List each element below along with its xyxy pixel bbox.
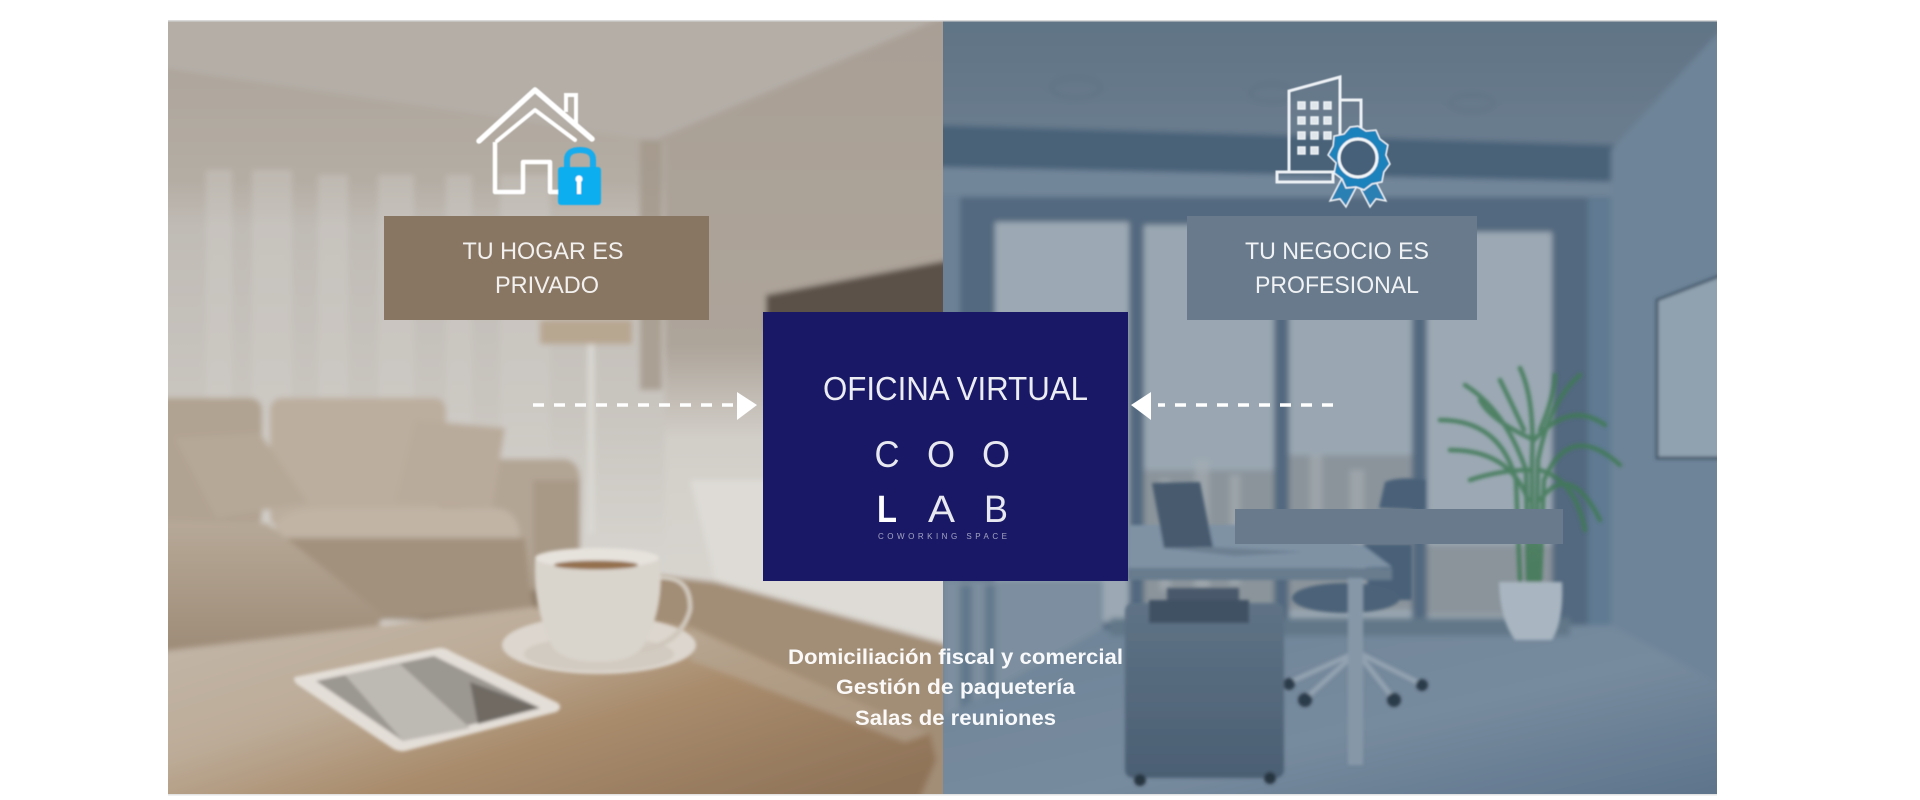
arrow: home to virtual office: [533, 392, 757, 420]
faint frame lines: [168, 20, 1717, 796]
logo: coolab: O: [927, 434, 955, 475]
sofa arm: [440, 459, 580, 590]
glass: [995, 222, 1129, 622]
chair seat: [1292, 583, 1400, 613]
logo: coolab: A: [928, 489, 956, 531]
beam: [930, 125, 1615, 182]
arrow: business to virtual office: [1131, 392, 1333, 420]
label: business: TU NEGOCIO ES: [1245, 238, 1429, 265]
reflection on table: [690, 628, 930, 742]
logo: coolab: B: [984, 489, 1008, 531]
padlock: [558, 150, 601, 205]
floor: [930, 625, 1730, 800]
plant: [1440, 368, 1620, 580]
icon: office building with award rosette: [1277, 77, 1390, 207]
infographic canvas: [168, 20, 1717, 796]
label: business: PROFESIONAL: [1255, 272, 1419, 299]
logo: coolab: [874, 434, 1010, 541]
text block: services list: Gestión de paquetería: [836, 676, 1075, 699]
pot: [1499, 582, 1562, 640]
cup handle: [659, 576, 694, 646]
lower left chrome area: [943, 581, 1105, 716]
logo: coolab: COWORKING SPACE: [878, 532, 1007, 541]
house roof: [479, 90, 592, 141]
house walls: [495, 142, 560, 192]
label: home: TU HOGAR ES: [462, 238, 624, 265]
lamp: [540, 320, 632, 344]
saucer: [502, 616, 696, 674]
sofa back: [168, 396, 264, 526]
tablet: [294, 648, 560, 751]
right wall: [1608, 146, 1618, 182]
heading: oficina virtual: OFICINA VIRTUAL: [823, 370, 1088, 407]
city skyline: [1144, 455, 1552, 615]
label: home: PRIVADO: [495, 272, 599, 299]
building windows: [1298, 102, 1331, 154]
grey band: [1235, 509, 1563, 544]
picture frame: [1654, 274, 1717, 461]
ribbons: [1330, 178, 1386, 207]
pillar: [1588, 198, 1612, 636]
curtains: [168, 196, 667, 628]
text block: services list: [788, 646, 1123, 730]
white cabinet: [694, 482, 763, 552]
sofa shadow base: [394, 591, 538, 624]
desk top: [1128, 525, 1392, 572]
chair base: [1290, 652, 1421, 698]
tv: [763, 258, 943, 312]
books: [1167, 588, 1239, 602]
panel: home photo background: [140, 0, 960, 800]
sofa chaise: [150, 520, 380, 655]
rosette: [1328, 126, 1390, 190]
chair back: [1379, 478, 1425, 510]
cup: [535, 552, 661, 662]
laptop: [1152, 482, 1213, 548]
desk leg: [1348, 578, 1363, 765]
logo: coolab: L: [877, 489, 897, 531]
sofa seat: [275, 508, 520, 540]
pillows: [260, 438, 275, 512]
label: business: [1187, 216, 1477, 320]
window frame: [960, 197, 1610, 635]
floor: [536, 573, 943, 794]
text block: services list: Domiciliación fiscal y comercial: [788, 646, 1123, 669]
logo: coolab: C: [874, 434, 900, 475]
text block: services list: Salas de reuniones: [855, 707, 1056, 730]
panel: virtual office navy box: [763, 312, 1128, 581]
ceiling: [150, 0, 960, 142]
panel: office photo background: [930, 0, 1730, 800]
building outline: [1289, 77, 1340, 172]
right wall: [662, 22, 943, 646]
cabinet: [1125, 603, 1284, 778]
icon: house with padlock: [479, 90, 601, 205]
ceiling: [943, 22, 1717, 128]
label: home: [384, 216, 709, 320]
logo: coolab: O: [982, 434, 1010, 475]
table: [150, 607, 936, 800]
